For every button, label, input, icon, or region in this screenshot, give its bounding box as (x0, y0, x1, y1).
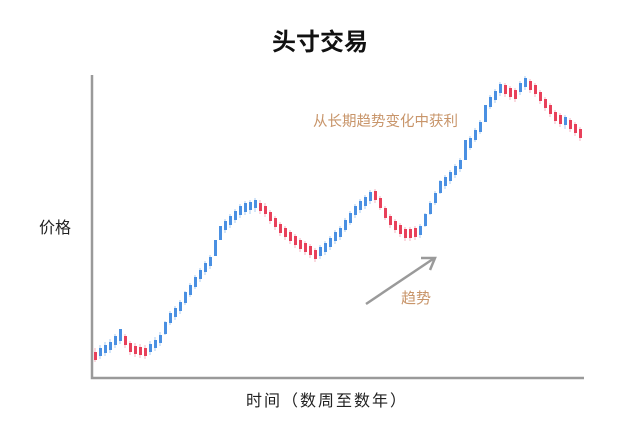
y axis label: 价格 (39, 220, 71, 237)
trend label: 趋势 (401, 290, 431, 307)
x axis label: 时间（数周至数年） (246, 393, 408, 410)
arrow: trend (366, 258, 435, 304)
candlesticks (94, 76, 582, 362)
axes (92, 75, 584, 378)
annotation: 从长期趋势变化中获利 (313, 114, 458, 130)
title: 头寸交易 (272, 29, 368, 56)
